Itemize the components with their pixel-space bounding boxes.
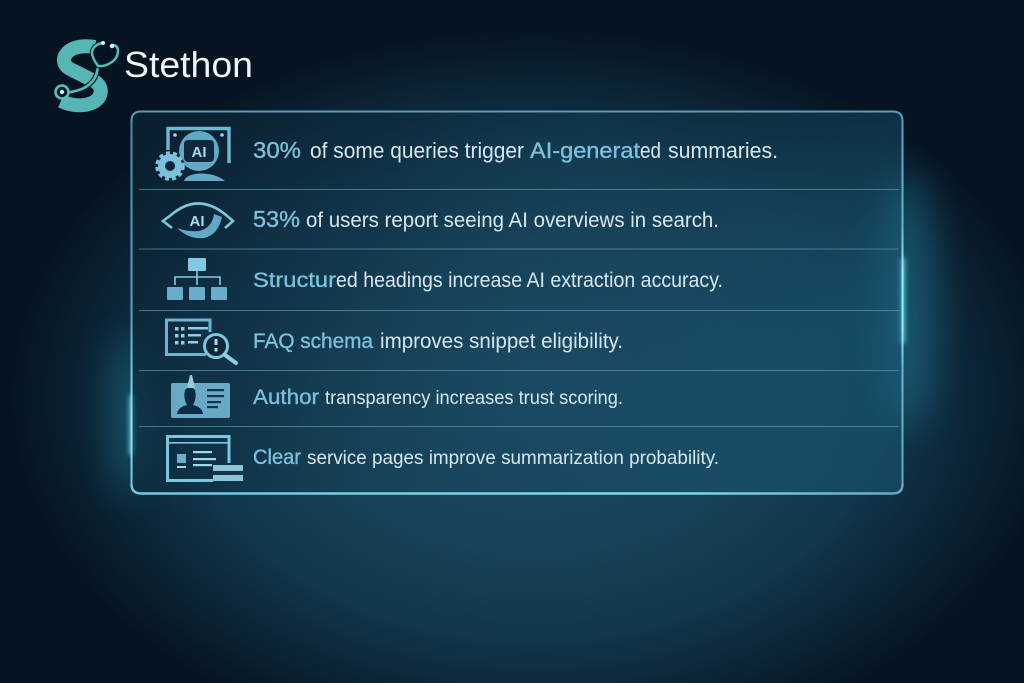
icon: service page with servers bbox=[168, 436, 243, 481]
text: improves snippet eligibility. bbox=[380, 330, 623, 353]
text bbox=[253, 330, 623, 353]
icon: author ID card bbox=[171, 375, 230, 418]
wordmark: Stethon bbox=[124, 44, 253, 85]
row 5 bbox=[171, 375, 623, 418]
text: of some queries trigger bbox=[310, 138, 524, 163]
row 1 bbox=[155, 128, 778, 181]
text: service pages improve summarization probability. bbox=[307, 447, 719, 469]
text bbox=[253, 137, 778, 163]
row 2 bbox=[163, 204, 719, 238]
text: of users report seeing AI overviews in search. bbox=[306, 209, 719, 232]
icon: AI eye: AI bbox=[190, 213, 204, 230]
row 6 bbox=[168, 436, 719, 481]
logo: Stethon bbox=[56, 41, 253, 105]
icon: hierarchy bbox=[167, 258, 227, 300]
text: summaries. bbox=[668, 138, 778, 163]
text: 53% bbox=[253, 206, 300, 232]
text: ed bbox=[640, 138, 661, 163]
text: FAQ schema bbox=[253, 330, 373, 353]
text: Structur bbox=[253, 269, 336, 292]
glow behind panel edges bbox=[112, 170, 936, 495]
icon: AI robot with gear bbox=[155, 128, 229, 181]
text: AI-generat bbox=[530, 138, 640, 163]
row 4 bbox=[166, 320, 623, 363]
row 3 bbox=[167, 258, 723, 300]
icon: AI robot with gear: AI bbox=[192, 144, 206, 161]
text: transparency increases trust scoring. bbox=[325, 387, 623, 409]
panel: statistics list bbox=[132, 112, 902, 494]
dividers bbox=[139, 190, 899, 426]
text: Author bbox=[253, 386, 319, 409]
text: 30% bbox=[253, 137, 301, 163]
icon: S with stethoscope bbox=[56, 41, 118, 105]
icon: AI eye bbox=[163, 204, 233, 238]
icon: FAQ list with magnifier bbox=[166, 320, 236, 363]
text: Clear bbox=[253, 446, 301, 469]
text: ed headings increase AI extraction accuracy. bbox=[336, 269, 723, 292]
